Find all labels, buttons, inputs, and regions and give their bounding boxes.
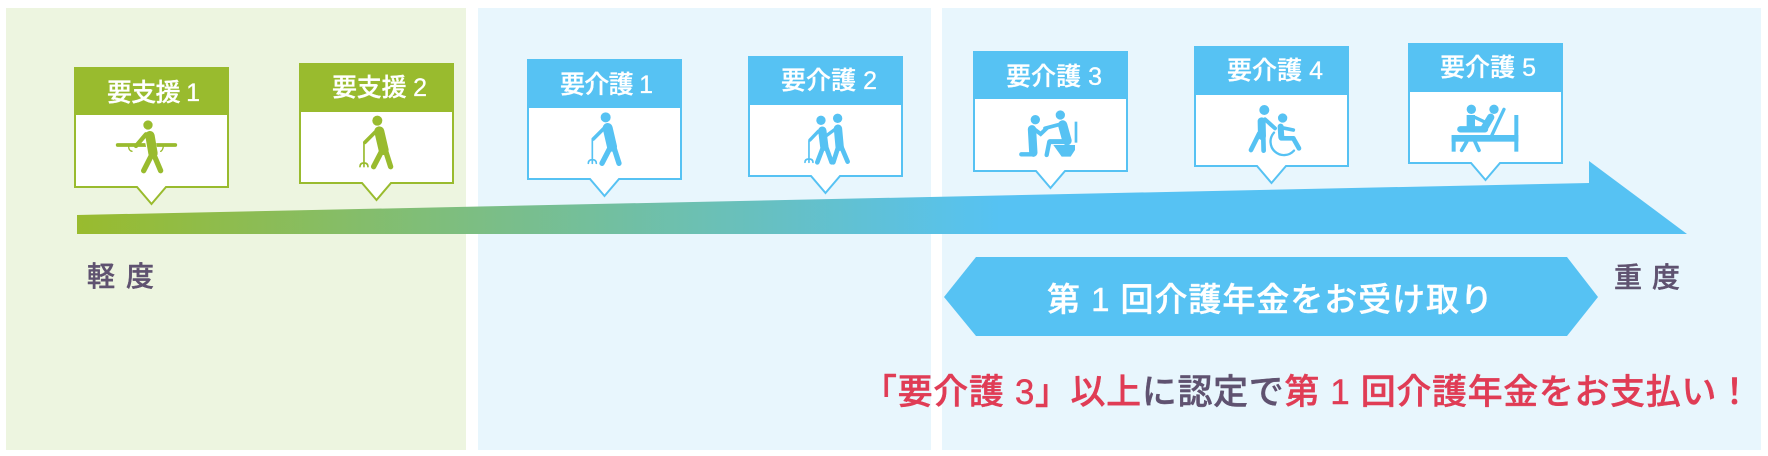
panel: care levels 3-5 — [942, 8, 1761, 450]
banner: first care pension received: 第 1 回介護年金をお受け取り — [1047, 281, 1493, 318]
icon: toilet assistance — [1021, 110, 1077, 157]
banner: first care pension received — [944, 257, 1598, 336]
panel: support level — [6, 8, 466, 450]
message: payment condition: 「要介護 3」以上に認定で第 1 回介護年金をお支払い！ — [862, 373, 1752, 412]
icon: wheelchair with caregiver — [1251, 105, 1299, 155]
icon: person with cane — [360, 116, 391, 167]
icon: person holding handrail — [118, 120, 175, 171]
callout: 要介護5 — [1408, 43, 1563, 180]
callout: 要支援2 — [299, 63, 454, 200]
callout: 要介護1 — [527, 59, 682, 196]
icon: bed care — [1452, 105, 1518, 152]
callout: 要介護3: 要介護 3 — [1006, 63, 1102, 91]
callout: 要介護4 — [1194, 46, 1349, 183]
label: severe: 重 度 — [1614, 262, 1680, 293]
callout: 要支援2: 要支援 2 — [332, 74, 427, 102]
panel: care levels 1-2 — [478, 8, 931, 450]
icon: person with cane — [588, 112, 619, 163]
callout: 要介護2: 要介護 2 — [781, 67, 877, 95]
label: mild: 軽 度 — [87, 261, 154, 292]
callout: 要介護3 — [973, 51, 1128, 188]
callout: 要介護1: 要介護 1 — [560, 71, 653, 99]
callout: 要介護2 — [748, 56, 903, 193]
severity gradient arrow — [77, 161, 1687, 234]
callout: 要支援1: 要支援 1 — [107, 79, 200, 107]
callout: 要支援1 — [74, 67, 229, 204]
icon: walking with helper — [805, 114, 848, 162]
callout: 要介護4: 要介護 4 — [1227, 57, 1323, 85]
callout: 要介護5: 要介護 5 — [1440, 54, 1536, 82]
